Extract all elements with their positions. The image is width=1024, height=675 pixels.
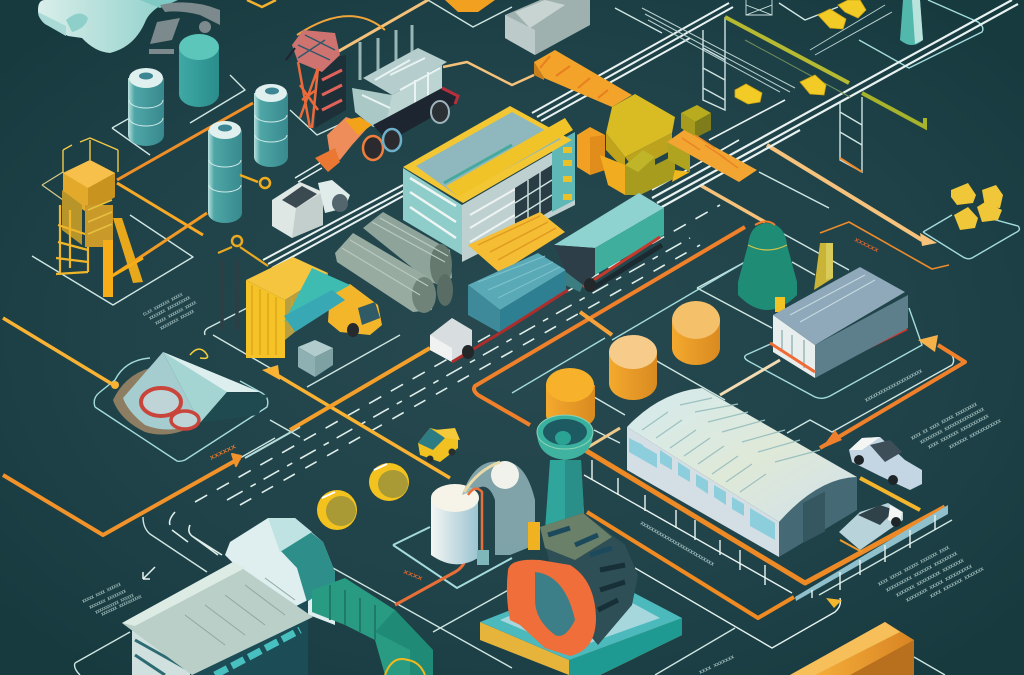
cylinder: dotted tank C [208,121,242,223]
text block: right caption upper: XXXXXXXXX XXXXXXXXXXXXXXXX [919,407,986,446]
icon: orange conveyor strip lower [667,130,757,182]
icon: yellow awning [468,212,565,273]
glass barrier band [795,505,948,601]
icon: olive cube [681,105,711,138]
icon: cloud pipe top left [38,0,178,53]
text block: right caption lower: XXXX XXXXX XXXXXX XXXXXXX XXXX [877,545,951,588]
text block: caption left of bottom building: XXXXX XXXX XXXXXX [81,582,122,605]
fence along hangar [584,460,792,593]
icon: yellow drums [735,0,866,104]
text block: left caption under tower [142,292,198,332]
icon: teal water tower [537,415,593,530]
text block: left caption under tower: XXXXX XXXXXXX XXXXX [154,300,198,327]
icon: grey machine top centre [505,0,590,55]
road with dashed lanes [170,205,720,555]
text block: right caption lower: XXXXXXXX XXXXX XXXXXXXXXX [905,564,973,604]
cylinder: orange tank far [672,301,720,365]
icon: yellow hook crane [218,236,268,330]
icon: small yellow truck [418,428,460,462]
cylinder: dotted tank A [128,68,164,146]
text block: caption along hangar fence: XXXXXXXXXXXXXXXXXXXXXXXXXXXX [639,521,715,568]
icon: gold coil B [369,463,409,501]
text block: caption under warehouse: XXXXXXXXXXXXXXXXXXXXXX [864,368,923,404]
icon: cooling unit [240,175,350,238]
icon: yellow assembly blocks [577,94,690,195]
text block: right caption lower [877,545,985,604]
icon: red crane [286,30,346,128]
icon: small grey box [298,340,333,377]
icon: tent with red ring window [113,349,268,435]
icon: blue container truck [430,253,568,362]
text block: right caption upper: XXXX XX XXXX XXXXX XXXXXXXXX [910,402,978,442]
cylinder: orange tank near [546,368,595,429]
text block: left caption under tower: XXXXXXX XXXXXXXXXX [148,295,192,322]
text block: right caption upper: XXXX XXXXXXX XXXXXXXXXXX [927,414,990,451]
label: red tag by tent: XXXXXX [209,443,238,462]
icon: yellow van and teal awning [284,268,382,337]
icon: white tank with pipes [431,461,540,565]
icon: green domed silo [738,222,797,312]
icon: orange block bottom right [790,622,914,675]
icon: grey warehouse with rail chassis [770,267,908,378]
text block: right caption lower: XXXX XXXXXXX XXXXXXX [929,566,985,600]
text block: left caption under tower: XXXXXXXX XXXXXX [159,309,196,332]
rail bridges [263,0,1018,268]
text block: right caption upper: XXXXXXX XXXXXXXXXXXX [948,418,1002,451]
cylinder: orange tank middle [609,335,657,400]
icon: teal container truck [554,193,664,292]
icon: truck with glass load [295,25,458,182]
icon: orange top machine and bracket [247,0,495,12]
icon: yellow cone chimney [814,243,833,290]
icon: white car lower [839,503,903,552]
scaffold towers [703,0,862,172]
icon: rock and orange ring [507,513,638,656]
text block: right caption lower: XXXXXXXXXX XXXXXXX XXXXXXXXX [885,551,959,594]
text block: caption left of bottom building: XXXXXXXXXXX XXXXXX [94,593,135,616]
icon: grey sign [149,2,220,54]
icon: yellow shipping container [246,257,328,358]
yellow-green gantry rail [725,17,925,127]
text block: caption left of bottom building [81,582,143,618]
icon: rolled grey hoses [335,212,453,313]
icon: orange conveyor strip upper [534,50,632,107]
icon: gold coil A [317,490,357,530]
cylinder: solid teal tank [179,34,219,107]
text block: caption left of bottom building: XXXXXXX XXXXXXXXXX [100,594,143,618]
icon: central factory building [403,106,575,262]
text block: caption left of bottom building: XXXXXXX XXXXXXXX [88,588,127,611]
icon: bottom left building with dome [122,518,335,675]
text block: right caption lower: XXXXXXX XXXXXXXXX XXXXXXXX [895,558,965,599]
icon: green segmented pipe [312,578,433,675]
label: red tag by tank: XXXX [402,568,424,583]
icon: white car upper [849,437,922,490]
text block: left caption under tower: CLXX XXXXXXX XXXXX [142,292,184,318]
cylinder: dotted tank B [254,84,288,167]
icon: teal platform base [480,575,682,675]
icon: hangar [627,388,857,557]
icon: teal chimney [900,0,923,45]
icon: yellow cubes [951,183,1003,230]
text block: right caption upper [910,402,1002,451]
icon: yellow watchtower [42,138,143,297]
label: red tag top right: XXXXXX [853,237,880,255]
